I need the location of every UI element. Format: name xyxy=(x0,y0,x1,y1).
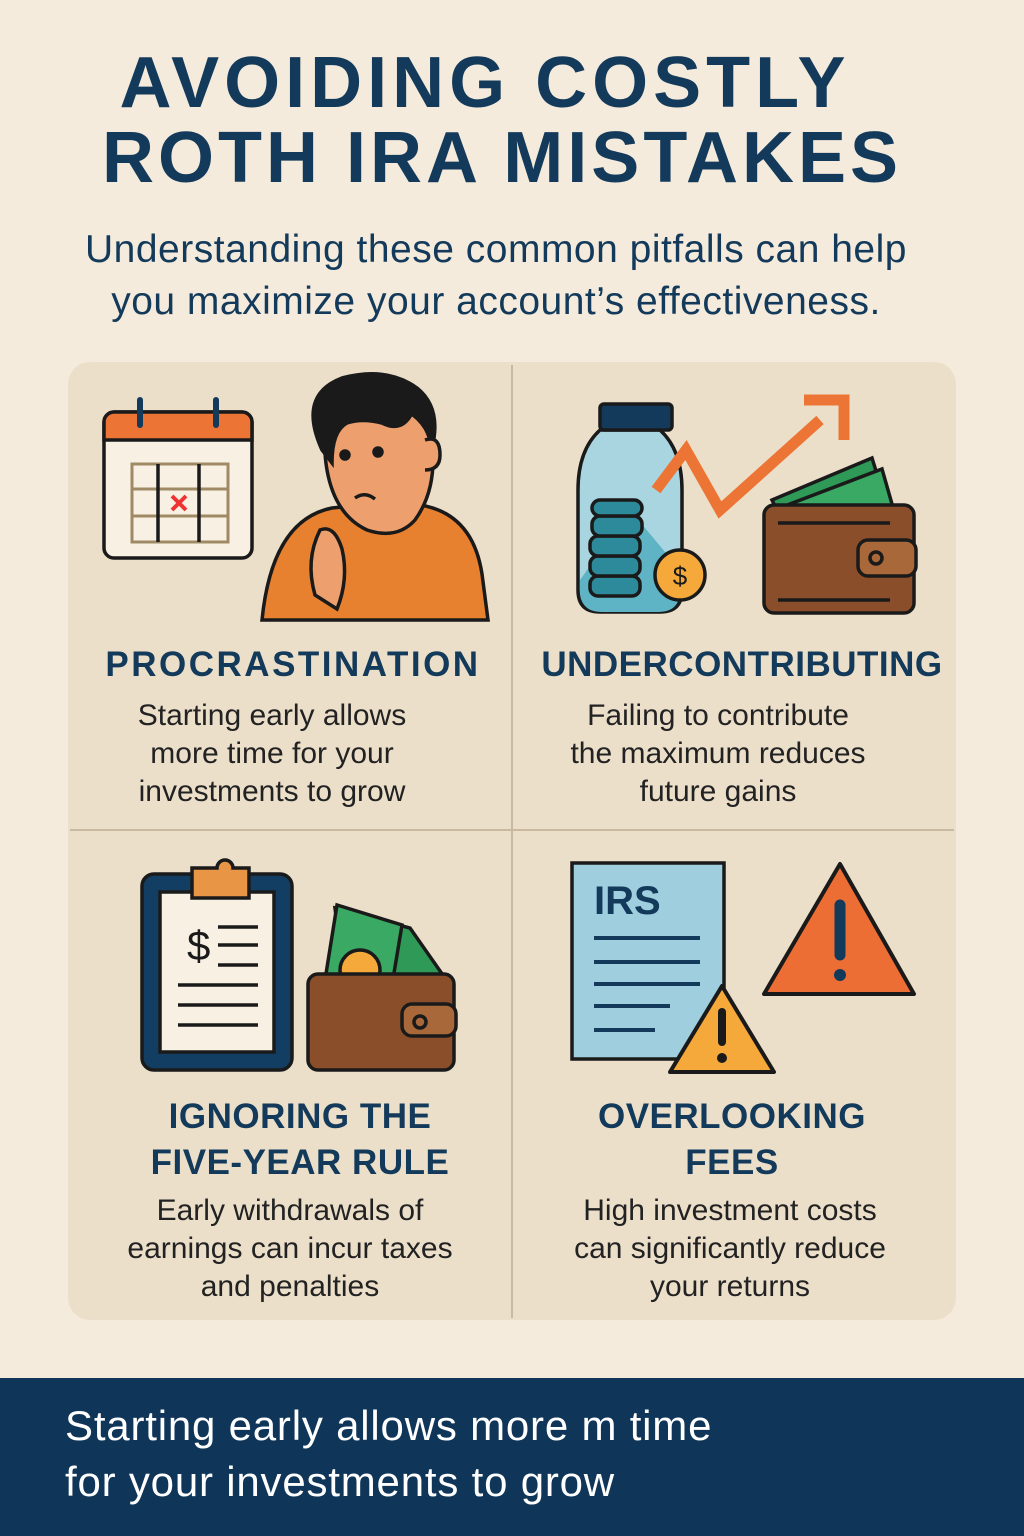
text: five-year rule: earnings can incur taxes xyxy=(127,1232,453,1265)
icon: jar with coins xyxy=(578,404,705,612)
heading: overlooking fees xyxy=(598,1097,866,1182)
icon: jar with coins: $ xyxy=(673,561,688,591)
heading: overlooking fees: FEES xyxy=(685,1143,779,1182)
text: undercontributing: the maximum reduces xyxy=(570,737,866,770)
heading: five-year rule: FIVE-YEAR RULE xyxy=(151,1143,449,1182)
text: procrastination: investments to grow xyxy=(139,775,405,808)
title: AVOIDING COSTLY xyxy=(119,43,851,123)
icon: thinking person xyxy=(262,374,488,620)
heading: undercontributing: UNDERCONTRIBUTING xyxy=(541,645,943,684)
text: undercontributing: future gains xyxy=(640,775,796,808)
footer text: for your investments to grow xyxy=(65,1458,615,1505)
subtitle xyxy=(85,228,907,323)
text: undercontributing xyxy=(570,699,866,808)
footer text xyxy=(65,1402,712,1505)
heading: five-year rule xyxy=(151,1097,449,1182)
icon: IRS document xyxy=(572,863,724,1059)
text: procrastination xyxy=(138,699,406,808)
text: overlooking fees: High investment costs xyxy=(583,1194,877,1227)
icon: clipboard: $ xyxy=(187,922,210,969)
icon: calendar xyxy=(104,400,252,558)
subtitle: Understanding these common pitfalls can help xyxy=(85,228,907,271)
footer banner xyxy=(0,1378,1024,1536)
title: ROTH IRA MISTAKES xyxy=(102,118,902,198)
footer text: Starting early allows more m time xyxy=(65,1402,712,1449)
icon: growth arrow xyxy=(656,400,844,510)
heading: procrastination: PROCRASTINATION xyxy=(105,645,481,684)
text: five-year rule: and penalties xyxy=(201,1270,379,1303)
icon: wallet with cash xyxy=(764,458,916,613)
heading: five-year rule: IGNORING THE xyxy=(169,1097,431,1136)
subtitle: you maximize your account’s effectiveness. xyxy=(111,280,881,323)
text: undercontributing: Failing to contribute xyxy=(587,699,849,732)
text: overlooking fees: your returns xyxy=(650,1270,810,1303)
icon: wallet with money xyxy=(308,905,456,1070)
title xyxy=(102,43,902,198)
text: five-year rule: Early withdrawals of xyxy=(157,1194,423,1227)
panel grid xyxy=(68,362,956,1320)
text: procrastination: more time for your xyxy=(150,737,394,770)
text: procrastination: Starting early allows xyxy=(138,699,406,732)
icon: warning triangles xyxy=(670,864,914,1072)
heading: overlooking fees: OVERLOOKING xyxy=(598,1097,866,1136)
text: five-year rule xyxy=(127,1194,453,1303)
icon: IRS document: IRS xyxy=(594,879,661,923)
text: overlooking fees: can significantly reduce xyxy=(574,1232,886,1265)
text: overlooking fees xyxy=(574,1194,886,1303)
icon: clipboard xyxy=(142,860,292,1070)
